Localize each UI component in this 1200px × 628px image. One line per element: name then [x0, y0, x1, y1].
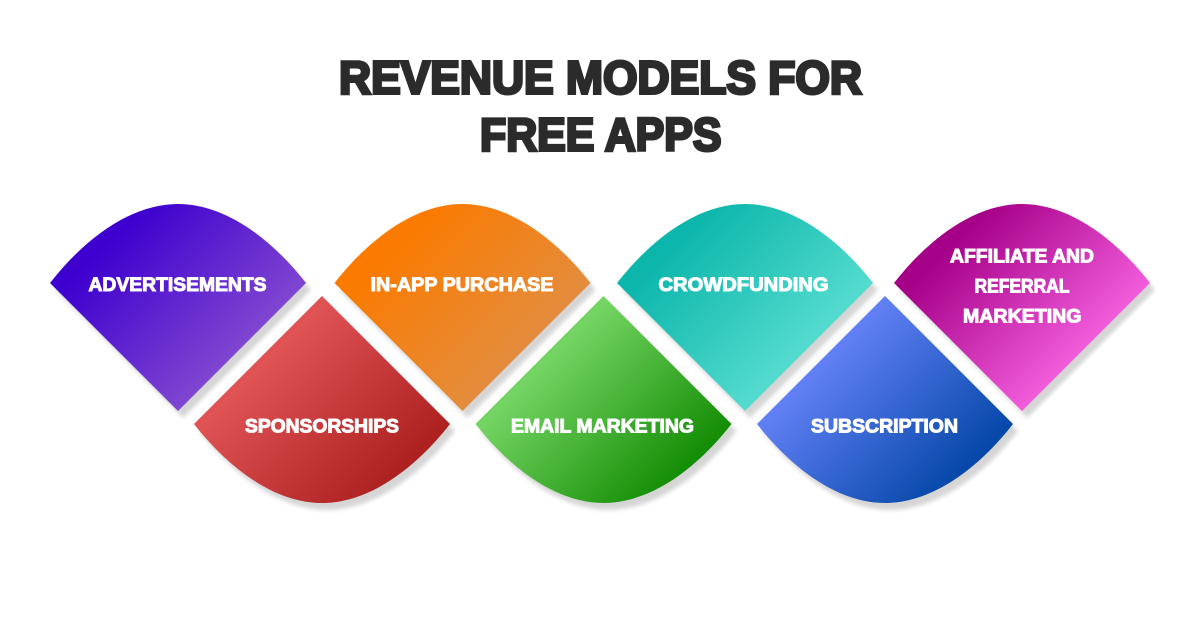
panel: advertisements: ADVERTISEMENTS	[88, 274, 266, 296]
panel: affiliate and referral marketing: MARKETING	[963, 305, 1082, 327]
panel: subscription	[757, 296, 1018, 510]
panel: affiliate and referral marketing: REFERRAL	[974, 275, 1070, 297]
panel: affiliate and referral marketing	[894, 204, 1155, 418]
panel: in-app purchase	[334, 204, 596, 418]
panel: email marketing: EMAIL MARKETING	[511, 415, 694, 437]
panel: crowdfunding	[617, 204, 878, 418]
panel: subscription: SUBSCRIPTION	[811, 415, 958, 437]
title: REVENUE MODELS FOR	[339, 52, 862, 104]
panel: advertisements	[50, 204, 311, 418]
panel: email marketing	[476, 296, 736, 510]
title	[339, 52, 862, 161]
panel: sponsorships: SPONSORSHIPS	[245, 415, 399, 437]
panel: sponsorships	[194, 296, 455, 510]
title: FREE APPS	[480, 109, 722, 161]
panel: affiliate and referral marketing: AFFILIATE AND	[950, 245, 1094, 267]
panel: in-app purchase: IN-APP PURCHASE	[370, 274, 554, 296]
panel: crowdfunding: CROWDFUNDING	[658, 274, 828, 296]
